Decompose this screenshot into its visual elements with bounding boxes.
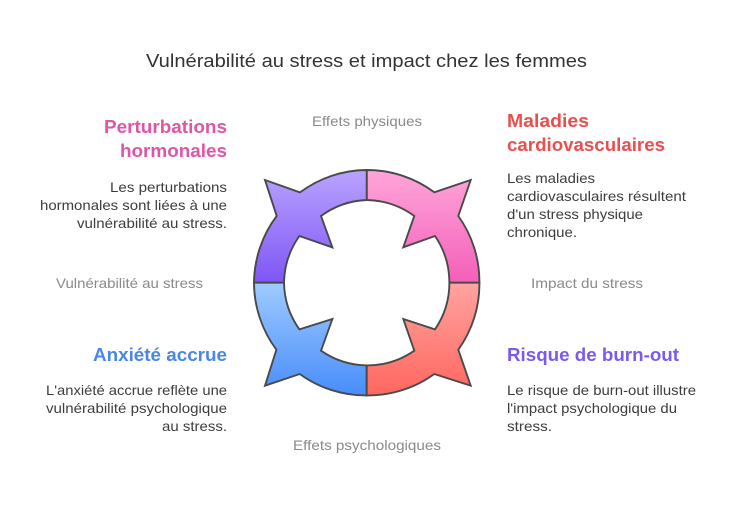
- body text: Les perturbations: [110, 179, 227, 195]
- body text: au stress.: [162, 418, 227, 434]
- body text: [46, 382, 227, 434]
- heading: Maladies: [507, 111, 589, 131]
- panel: risque de burn-out: [507, 345, 696, 434]
- segment: top right pink: [367, 170, 479, 283]
- panel: perturbations hormonales: [40, 117, 227, 231]
- body text: chronique.: [507, 224, 577, 240]
- segment: bottom right red: [367, 283, 479, 395]
- body text: [40, 179, 227, 231]
- heading: [104, 117, 227, 161]
- panel: maladies cardiovasculaires: [507, 111, 686, 240]
- axis label: bottom: Effets psychologiques: [293, 437, 441, 453]
- body text: stress.: [507, 418, 552, 434]
- heading: cardiovasculaires: [507, 135, 665, 155]
- segment: bottom left blue: [254, 283, 367, 395]
- axis label: left: Vulnérabilité au stress: [56, 275, 203, 291]
- panel: anxiété accrue: [46, 345, 227, 434]
- body text: vulnérabilité au stress.: [77, 215, 227, 231]
- body text: hormonales sont liées à une: [40, 197, 227, 213]
- title: Vulnérabilité au stress et impact chez les femmes: [146, 51, 587, 71]
- body text: L'anxiété accrue reflète une: [46, 382, 227, 398]
- body text: Les maladies: [507, 170, 595, 186]
- body text: vulnérabilité psychologique: [46, 400, 227, 416]
- segment: top left purple: [254, 170, 367, 283]
- axis label: top: Effets physiques: [312, 113, 422, 129]
- body text: [507, 382, 696, 434]
- body text: Le risque de burn-out illustre: [507, 382, 696, 398]
- body text: cardiovasculaires résultent: [507, 188, 686, 204]
- heading: [507, 111, 665, 155]
- heading: hormonales: [120, 141, 227, 161]
- axis label: right: Impact du stress: [531, 275, 643, 291]
- heading: Risque de burn-out: [507, 345, 679, 365]
- heading: Perturbations: [104, 117, 227, 137]
- heading: Anxiété accrue: [93, 345, 227, 365]
- body text: [507, 170, 686, 240]
- cycle diagram: [254, 170, 479, 395]
- body text: d'un stress physique: [507, 206, 643, 222]
- body text: l'impact psychologique du: [507, 400, 677, 416]
